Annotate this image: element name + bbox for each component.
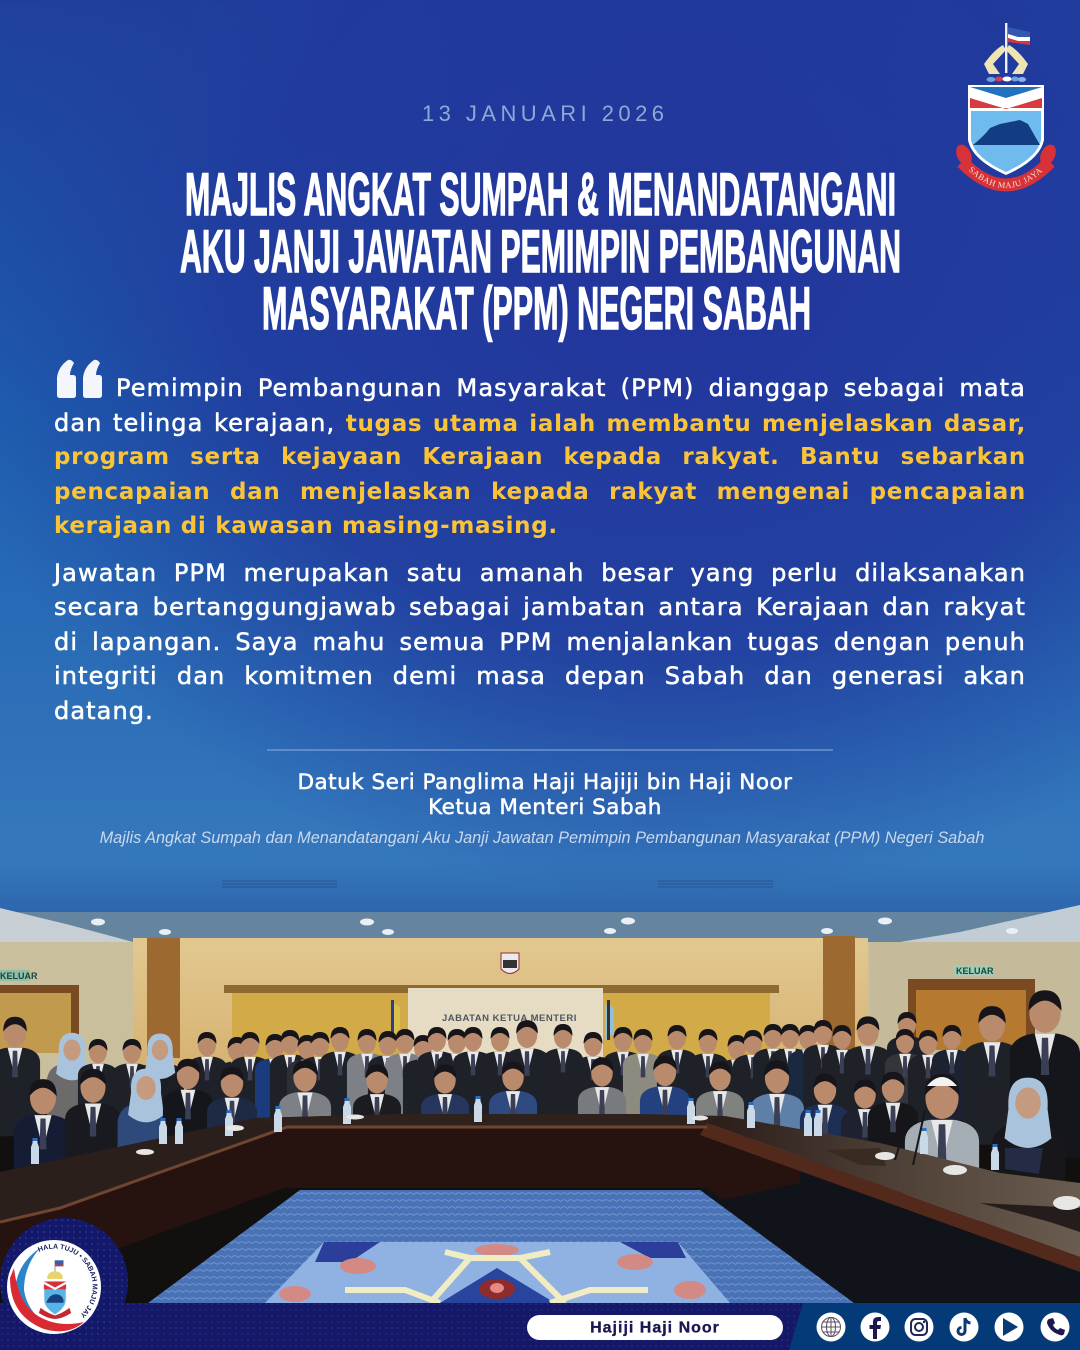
carpet [148,1190,854,1303]
icon: video play [994,1312,1024,1342]
state crest: Sabah coat of arms [956,23,1056,192]
badge: Hala Tuju Sabah Maju Jaya logo [0,1218,128,1346]
photo: conference room group portrait [0,860,1080,1303]
quote paragraph 2: Jawatan PPM merupakan satu amanah besar yang perlu dilaksanakan [54,559,1026,587]
table: under-table shadow [700,1128,1080,1303]
quote paragraph 2: di lapangan. Saya mahu semua PPM menjalankan tugas dengan penuh [54,628,1026,656]
quote paragraph 1: program serta kejayaan Kerajaan kepada rakyat. Bantu sebarkan [54,444,1026,470]
attribution [100,770,984,847]
table: right surface [707,1116,1080,1257]
icon: facebook [860,1312,890,1342]
table items: water bottles, cups and laptop [31,1096,1080,1232]
icon: quotation mark [57,360,102,398]
table: right front face [707,1123,800,1200]
icon: phone [1040,1312,1070,1342]
room: ceiling [0,860,1080,942]
divider [267,749,833,751]
badge: curved slogan: HALA TUJU • SABAH MAJU JAYA [38,1244,98,1318]
room: walls and panels: KELUAR [0,971,38,981]
quote paragraph 1: dan telinga kerajaan, tugas utama ialah membantu menjelaskan dasar, [54,409,1026,437]
quote paragraph 1: Pemimpin Pembangunan Masyarakat (PPM) dianggap sebagai mata [116,374,1026,402]
footer: social panel [789,1303,1080,1350]
name pill: Hajiji Haji Noor [590,1320,720,1336]
icon: website globe [816,1312,846,1342]
quote paragraph 2: datang. [54,697,154,725]
crest: arms holding pole [984,45,1028,74]
room: walls and panels: JABATAN KETUA MENTERI [442,1013,577,1024]
quote paragraph 2: integriti dan komitmen demi masa depan Sabah dan generasi akan [54,662,1026,690]
people: seated row [14,1056,1065,1251]
crest: flag and pole [1005,23,1030,73]
date: 13 JANUARI 2026 [422,101,664,126]
quote paragraph 1: pencapaian dan menjelaskan kepada rakyat mengenai pencapaian [54,479,1026,505]
table: left surface [0,1114,400,1222]
conference table [0,1096,1080,1303]
room: walls and panels [0,936,1080,1132]
icon: tiktok [950,1312,978,1342]
room: walls and panels: KELUAR [956,966,994,976]
quote paragraph 2 [52,559,1026,725]
patterned rug [265,1242,730,1303]
speaker name: Datuk Seri Panglima Haji Hajiji bin Haji Noor [297,770,793,795]
footer bar [0,1303,1080,1350]
name pill [527,1315,783,1340]
event caption: Majlis Angkat Sumpah dan Menandatangani Aku Janji Jawatan Pemimpin Pembangunan Masyarakat (PPM) Negeri Sabah [100,829,984,847]
title [180,161,901,342]
table: left front face [0,1127,287,1290]
crest: shield [968,85,1044,175]
quote paragraph 1: kerajaan di kawasan masing-masing. [54,513,558,539]
table: centre surface [255,1114,725,1127]
speaker role: Ketua Menteri Sabah [428,795,662,820]
quote text block [52,374,1026,725]
icon: instagram [904,1312,934,1342]
people: standing row [0,990,1080,1158]
crest: wreath [986,76,1026,82]
table: wooden rim [700,1123,1080,1272]
crest: ribbon motto [956,144,1056,192]
table: centre front face [287,1127,707,1188]
quote paragraph 1 [54,374,1026,539]
badge: miniature crest [39,1260,71,1319]
crest: ribbon motto: SABAH MAJU JAYA [968,167,1042,188]
floor shadow base [0,1100,1080,1303]
quote paragraph 2: secara bertanggungjawab sebagai jambatan antara Kerajaan dan rakyat [54,593,1026,621]
